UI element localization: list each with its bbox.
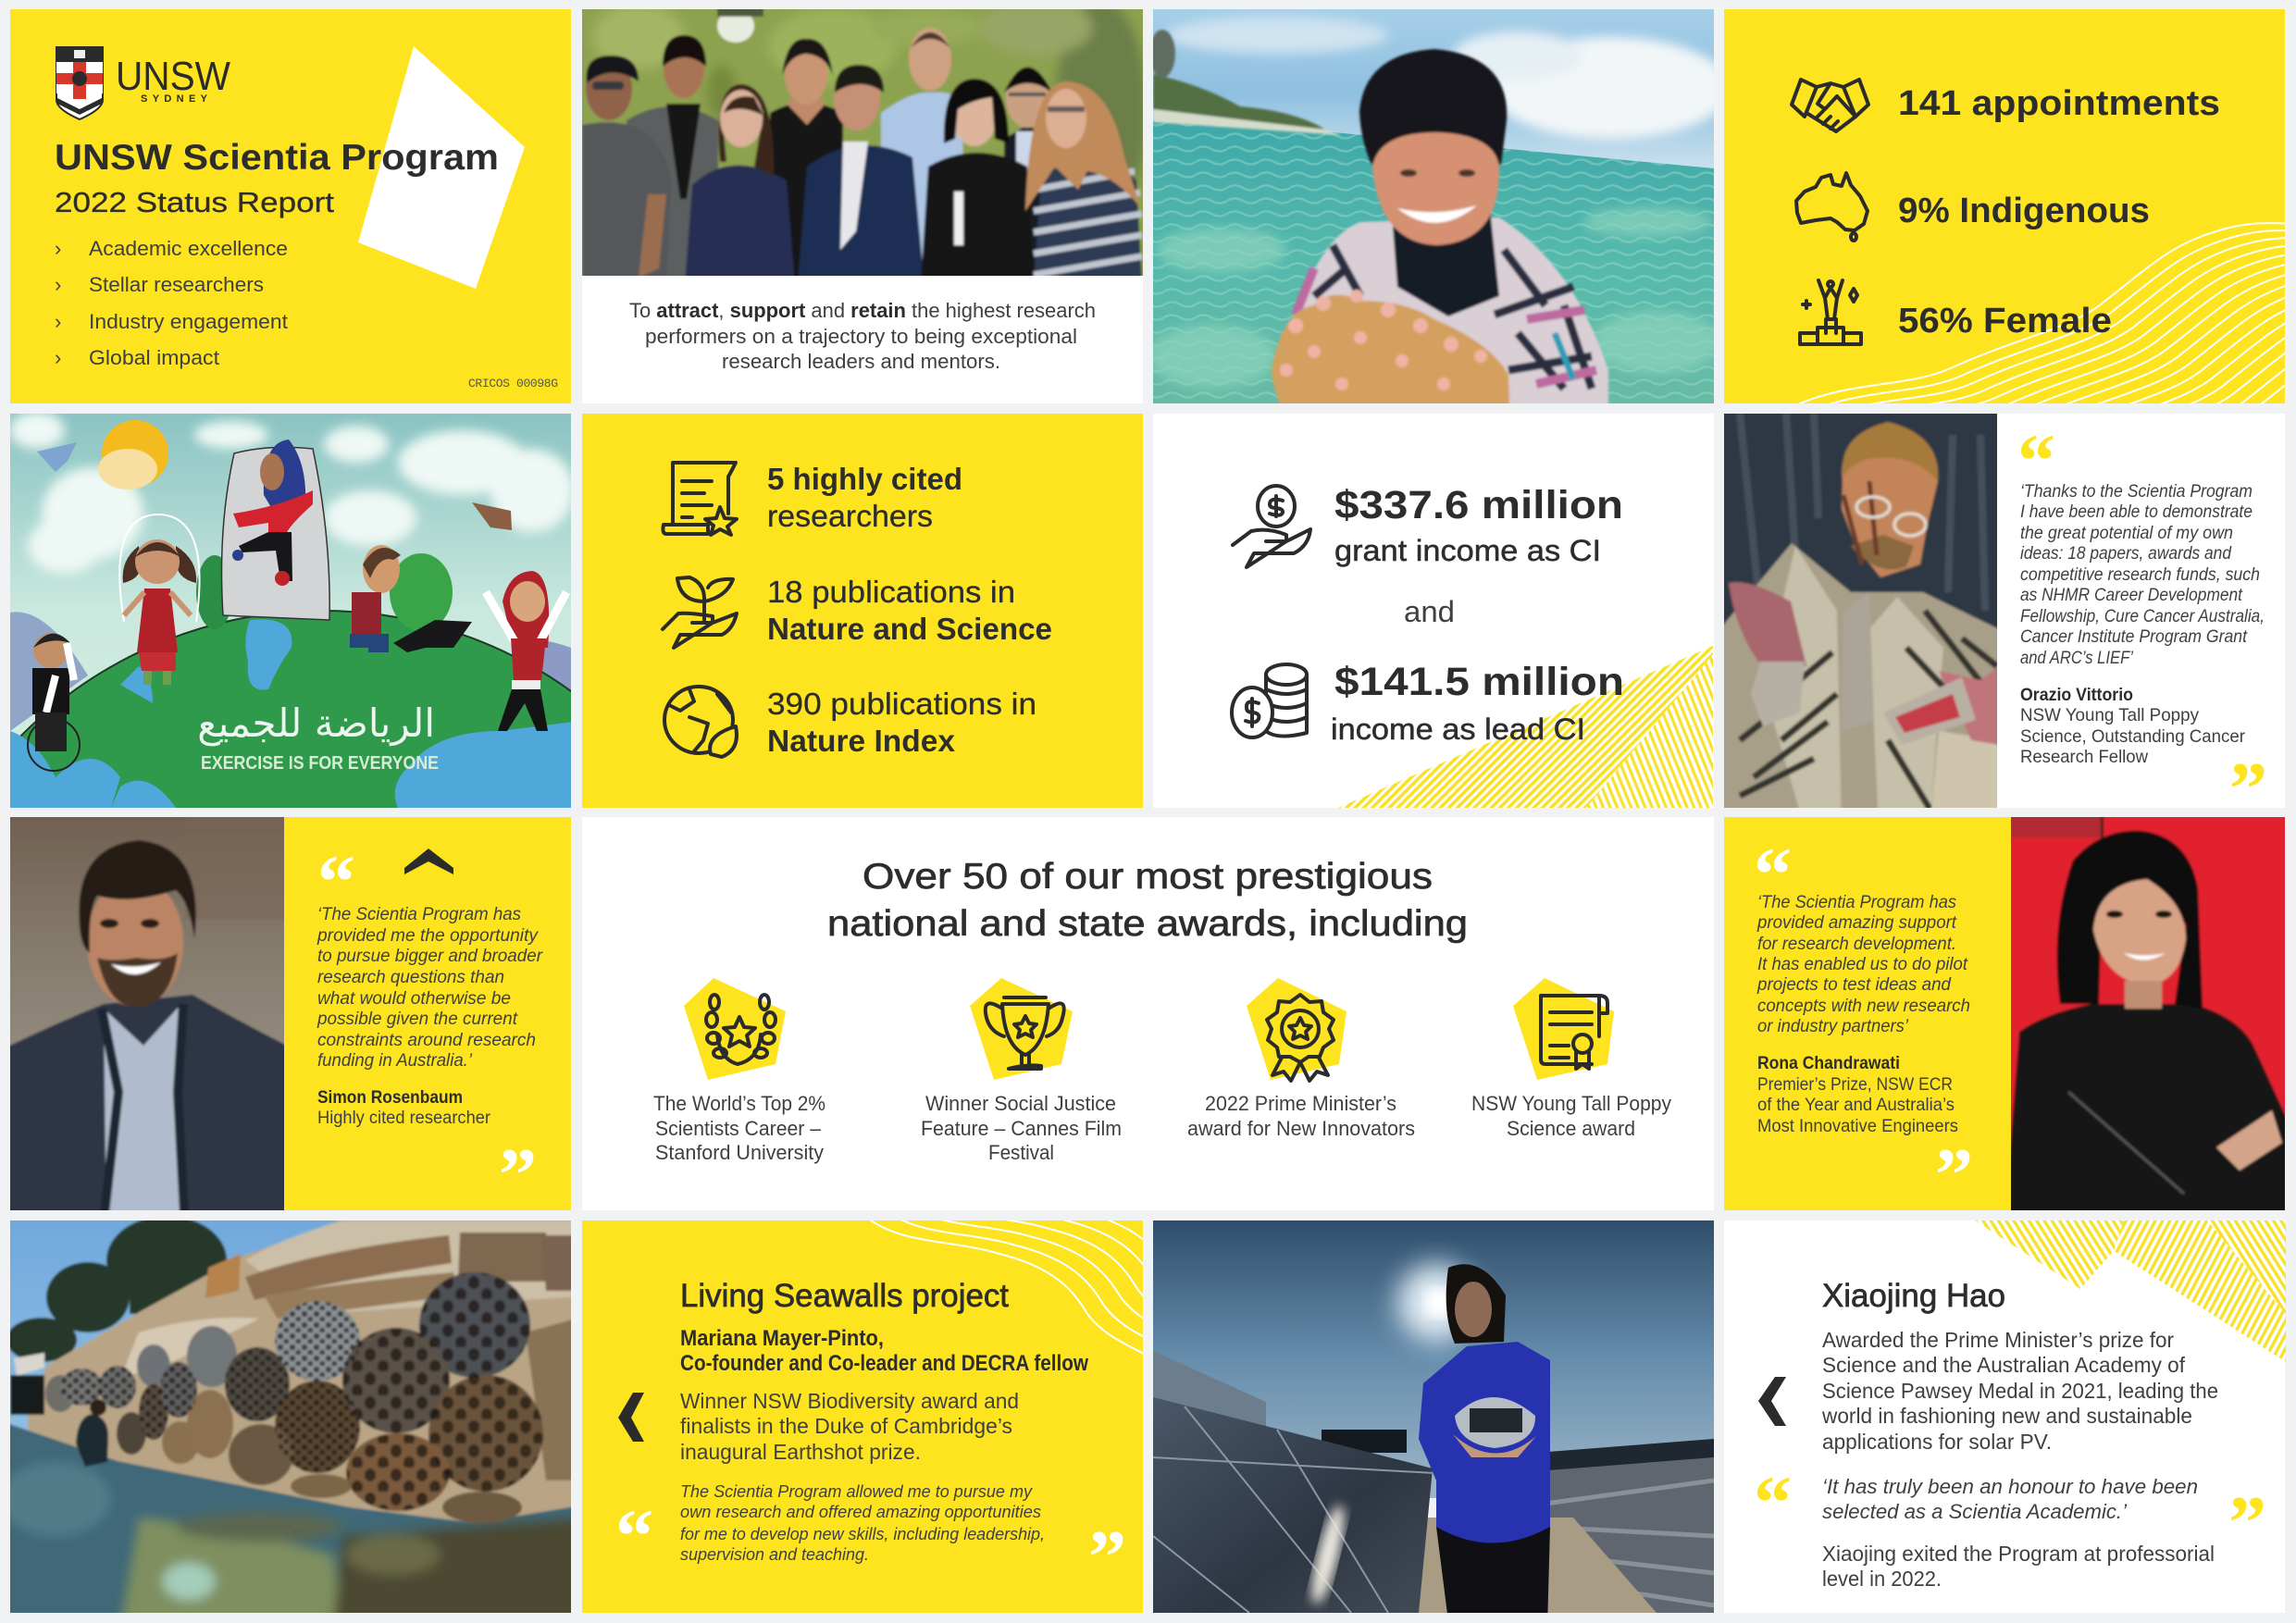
quote mark close: ” (2229, 747, 2267, 831)
biography: Awarded the Prime Minister’s prize for (1822, 1328, 2174, 1352)
mission statement (629, 299, 1096, 373)
heading: national and state awards, including (827, 904, 1468, 944)
award description: Winner NSW Biodiversity award and (680, 1389, 1019, 1413)
bullet list (55, 237, 288, 369)
icon: sun (98, 420, 168, 489)
biography: Science Pawsey Medal in 2021, leading the (1822, 1379, 2218, 1403)
wave pattern (871, 1171, 1247, 1356)
quote text: as NHMR Career Development (2020, 585, 2243, 605)
quote text: concepts with new research (1757, 996, 1970, 1016)
panel: appointment stats (1724, 9, 2285, 403)
label: Scientists Career – (655, 1117, 822, 1140)
quote mark close: ” (1088, 1515, 1126, 1599)
bush (196, 555, 233, 629)
award description (680, 1389, 1019, 1464)
quote text: to pursue bigger and broader (317, 946, 543, 966)
biography: applications for solar PV. (1822, 1430, 2052, 1454)
award description: finalists in the Duke of Cambridge’s (680, 1414, 1012, 1438)
stat: highly cited: 5 highly cited (767, 462, 962, 496)
award: tall poppy (1471, 978, 1671, 1140)
connector text: and (1404, 595, 1455, 628)
name and role (680, 1326, 1088, 1376)
attribution: Rona Chandrawati (1757, 1053, 1900, 1073)
mission statement: performers on a trajectory to being exceptional (645, 325, 1077, 348)
solar panels (1153, 1397, 1434, 1613)
quote mark open: “ (2017, 418, 2055, 502)
panel: Xiaojing Hao (1724, 1220, 2286, 1613)
illustration title: EXERCISE IS FOR EVERYONE (201, 753, 439, 774)
label: Festival (988, 1141, 1054, 1164)
photo: research team (582, 9, 1143, 276)
island (1149, 30, 1342, 135)
stat: highly cited: researchers (767, 499, 933, 533)
label: The World’s Top 2% (653, 1092, 825, 1115)
attribution (2020, 685, 2245, 767)
quote text: or industry partners’ (1757, 1016, 1909, 1036)
quote text: ideas: 18 papers, awards and (2020, 543, 2232, 564)
stat: nature index (767, 687, 1036, 758)
quote text: supervision and teaching. (680, 1544, 869, 1564)
attribution: Most Innovative Engineers (1757, 1116, 1958, 1136)
label (653, 1092, 825, 1164)
p3 (685, 164, 796, 276)
bullet list: › (55, 273, 61, 296)
pier (14, 1353, 44, 1376)
quote text (1822, 1475, 2198, 1523)
panel: Rona Chandrawati quote (1724, 799, 2296, 1231)
quote text: provided me the opportunity (316, 925, 539, 946)
child: boy sitting (350, 545, 472, 652)
mountains (10, 612, 88, 731)
habitat tiles (45, 1272, 543, 1523)
stone wall (28, 1220, 592, 1555)
hatch pattern (1338, 646, 1713, 808)
exit note (1822, 1542, 2215, 1591)
quote text: own research and offered amazing opportunities (680, 1502, 1041, 1521)
panel: photo of reef researcher (1148, 9, 1731, 426)
award: prime minister (1187, 978, 1415, 1140)
water (0, 1418, 592, 1623)
cricos code: CRICOS 00098G (468, 377, 558, 390)
label: Science award (1507, 1117, 1635, 1140)
logo wordmark: UNSW (116, 54, 230, 99)
quote text: possible given the current (316, 1009, 519, 1029)
mission statement: research leaders and mentors. (722, 350, 1000, 373)
stat: lead income (1331, 660, 1624, 746)
heading: Over 50 of our most prestigious (863, 857, 1433, 897)
panel: grant income (1153, 414, 1714, 808)
p8 (1003, 126, 1042, 276)
exit note: Xiaojing exited the Program at professorial (1822, 1542, 2215, 1566)
quote text: It has enabled us to do pilot (1757, 954, 1968, 974)
stat: lead income: $141.5 million (1334, 660, 1624, 704)
heading (827, 857, 1468, 944)
child: wheelchair (28, 633, 80, 771)
chevron left (1758, 1377, 1786, 1426)
trees (6, 1216, 227, 1362)
portrait photo (0, 799, 305, 1231)
attribution: Science, Outstanding Cancer (2020, 726, 2245, 747)
heading: Living Seawalls project (680, 1278, 1009, 1314)
chevron left (618, 1393, 644, 1442)
name and role: Co-founder and Co-leader and DECRA fellow (680, 1351, 1088, 1376)
head (1842, 424, 1938, 577)
portrait photo (1992, 799, 2296, 1231)
sun glare (1397, 1264, 1475, 1342)
award description: inaugural Earthshot prize. (680, 1440, 921, 1464)
quote text: Fellowship, Cure Cancer Australia, (2020, 606, 2265, 626)
attribution (317, 1087, 490, 1128)
attribution (1757, 1053, 1958, 1136)
icon: Australia map (1796, 173, 1868, 241)
quote mark open: “ (1754, 832, 1792, 916)
quote mark close: ” (2228, 1481, 2266, 1565)
quote text: I have been able to demonstrate (2020, 502, 2253, 522)
quote text (1756, 892, 1970, 1036)
stat: lead income: income as lead CI (1331, 712, 1585, 746)
panel: awards (582, 817, 1714, 1210)
icon: handshake (1792, 80, 1868, 131)
award: cannes (921, 978, 1122, 1164)
icon: birds (37, 442, 512, 530)
panel: exercise illustration (10, 414, 571, 808)
bullet list: Stellar researchers (89, 273, 264, 296)
panel: publication stats (582, 414, 1143, 808)
name: Xiaojing Hao (1822, 1278, 2005, 1314)
p1 (582, 120, 629, 276)
p6 (879, 91, 965, 261)
child: reaching girl (486, 571, 566, 731)
label (1471, 1092, 1671, 1140)
quote mark close: ” (1935, 1133, 1973, 1217)
bullet list: › (55, 310, 61, 333)
label (921, 1092, 1122, 1164)
icon: coin in hand (1233, 486, 1310, 567)
right roof (1536, 1457, 1714, 1613)
quote text: the great potential of my own (2020, 523, 2233, 543)
p2 (627, 106, 718, 296)
subtitle: 2022 Status Report (55, 186, 334, 218)
coat (1712, 543, 1999, 833)
icon: figure on podium (1800, 280, 1861, 344)
biography (1821, 1328, 2218, 1454)
bullet list: Academic excellence (89, 237, 288, 260)
quote text (2020, 481, 2265, 668)
panel: team photo and mission (565, 0, 1161, 403)
attribution: Orazio Vittorio (2020, 685, 2133, 705)
quote text: constraints around research (317, 1030, 536, 1050)
quote text: The Scientia Program allowed me to pursue my (680, 1481, 1034, 1501)
icon: scroll with star (663, 463, 737, 535)
bullet list: › (55, 237, 61, 260)
quote text: selected as a Scientia Academic.’ (1822, 1500, 2128, 1523)
building (1153, 1351, 1266, 1471)
stat: grant income: $337.6 million (1334, 483, 1623, 527)
label (1187, 1092, 1415, 1140)
attribution: Simon Rosenbaum (317, 1087, 463, 1108)
quote mark close: ” (499, 1133, 537, 1217)
stat: nature and science: Nature and Science (767, 612, 1052, 646)
icon: plant in hand (663, 577, 737, 648)
quote text (316, 904, 543, 1071)
quote text: for me to develop new skills, including leadership, (680, 1524, 1045, 1543)
label: Stanford University (655, 1141, 824, 1164)
label: Winner Social Justice (925, 1092, 1116, 1115)
bullet list: › (55, 346, 61, 369)
title heading: UNSW Scientia Program (55, 138, 499, 178)
child: climber (232, 440, 313, 586)
p5 (797, 144, 925, 276)
quote text: and ARC’s LIEF’ (2020, 648, 2134, 668)
globe (10, 610, 571, 808)
panel: Orazio Vittorio quote (1706, 395, 2285, 833)
child: skipping girl (119, 514, 200, 685)
name and role: Mariana Mayer-Pinto, (680, 1326, 884, 1351)
quote text: ‘The Scientia Program has (1757, 892, 1956, 912)
quote text: provided amazing support (1756, 912, 1958, 933)
stat: nature index: 390 publications in (767, 687, 1036, 721)
hatch pattern (1975, 1220, 2286, 1362)
stat: indigenous: 9% Indigenous (1898, 192, 2150, 230)
stat: nature index: Nature Index (767, 724, 956, 758)
exit note: level in 2022. (1822, 1567, 1942, 1591)
attribution: Highly cited researcher (317, 1108, 490, 1128)
quote text: ‘Thanks to the Scientia Program (2020, 481, 2253, 502)
chevron up (404, 849, 453, 874)
biography: Science and the Australian Academy of (1822, 1353, 2186, 1377)
quote mark open: “ (615, 1493, 653, 1578)
stat: grant income: grant income as CI (1334, 534, 1601, 567)
quote text: ‘The Scientia Program has (317, 904, 521, 924)
panel: Simon Rosenbaum quote (0, 799, 571, 1231)
quote text: ‘It has truly been an honour to have been (1822, 1475, 2198, 1498)
p4 (770, 103, 843, 296)
attribution: of the Year and Australia’s (1757, 1095, 1955, 1115)
quote text: funding in Australia.’ (317, 1050, 473, 1071)
coral (1270, 293, 1510, 403)
painting portrait (1706, 395, 2016, 833)
woman in blue (1419, 1264, 1550, 1623)
stat: nature and science: 18 publications in (767, 575, 1015, 609)
clouds (9, 412, 574, 574)
hands (1729, 582, 1806, 668)
quote text (680, 1481, 1045, 1564)
quote mark open: “ (1754, 1460, 1792, 1544)
quote text: what would otherwise be (317, 988, 511, 1009)
bullet list: Global impact (89, 346, 219, 369)
icon: UNSW crest (56, 47, 103, 119)
mission statement: To attract, support and retain the highest research (629, 299, 1096, 322)
panel: title (10, 9, 571, 403)
attribution: NSW Young Tall Poppy (2020, 705, 2199, 725)
panel: seawall photo (0, 1203, 592, 1623)
stat: highly cited (767, 462, 962, 533)
attribution: Premier’s Prize, NSW ECR (1757, 1074, 1953, 1095)
panel: Living Seawalls project (582, 1171, 1247, 1613)
illustration title: الرياضة للجميع (197, 700, 435, 747)
stat: nature and science (767, 575, 1052, 646)
label: NSW Young Tall Poppy (1471, 1092, 1671, 1115)
quote text: Cancer Institute Program Grant (2020, 626, 2248, 647)
icon: coin stack (1232, 664, 1307, 737)
quote text: for research development. (1757, 934, 1956, 954)
quote text: projects to test ideas and (1756, 974, 1952, 995)
shirt (1301, 216, 1610, 403)
illustration title (197, 700, 439, 774)
panel: solar photo (1153, 1220, 1714, 1623)
stat: appointments: 141 appointments (1898, 84, 2220, 123)
wave pattern (1797, 222, 2285, 403)
p7 (920, 152, 1033, 276)
quote text: competitive research funds, such (2020, 564, 2260, 585)
award: top 2% (653, 978, 825, 1164)
swimmer (76, 1414, 108, 1467)
biography: world in fashioning new and sustainable (1821, 1404, 2192, 1428)
logo wordmark: SYDNEY (141, 93, 208, 105)
quote text: research questions than (317, 967, 504, 987)
label: 2022 Prime Minister’s (1205, 1092, 1396, 1115)
bullet list: Industry engagement (89, 310, 288, 333)
climbing wall (222, 447, 329, 620)
label: award for New Innovators (1187, 1117, 1415, 1140)
stat: grant income (1334, 483, 1623, 567)
label: Feature – Cannes Film (921, 1117, 1122, 1140)
attribution: Research Fellow (2020, 747, 2149, 767)
hair and face (1359, 49, 1507, 165)
quote mark open: “ (317, 839, 355, 923)
icon: globe with leaf (664, 687, 737, 757)
stat: female: 56% Female (1898, 302, 2112, 341)
p9 (1033, 167, 1143, 276)
